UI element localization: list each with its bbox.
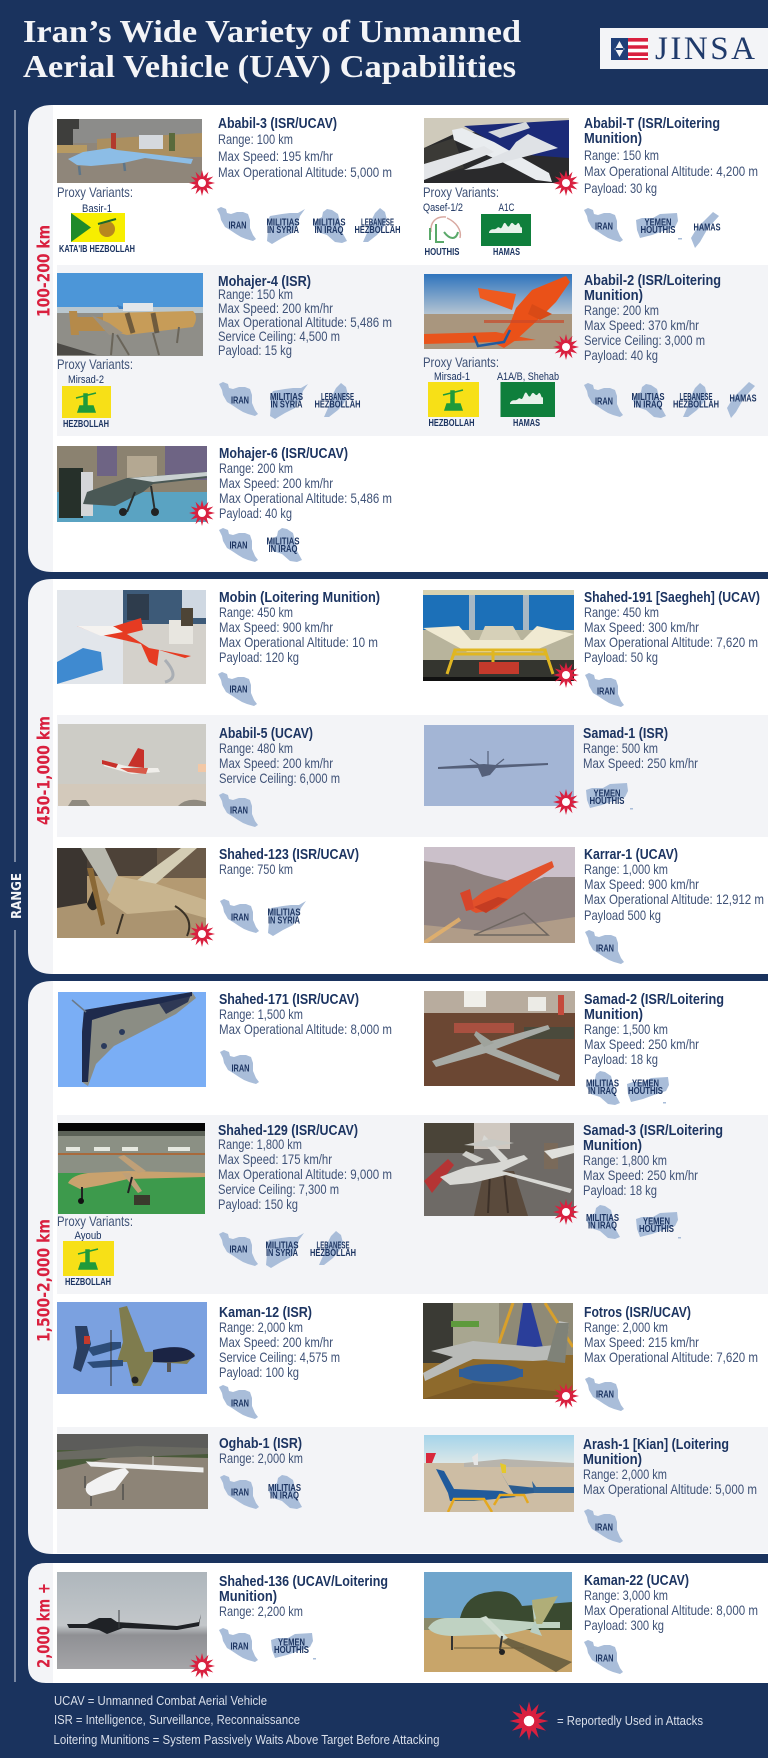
map: Iran bbox=[584, 1509, 623, 1543]
map: Lebanese Hezbollah: HEZBOLLAH bbox=[314, 400, 360, 410]
map: Iran bbox=[219, 793, 258, 827]
specs bbox=[584, 1573, 758, 1633]
map: Militias in Iraq: IN IRAQ bbox=[634, 400, 663, 410]
map: Yemen Houthis: HOUTHIS bbox=[639, 1224, 674, 1235]
map: Militias in Iraq: MILITIAS bbox=[312, 218, 346, 228]
attack marker bbox=[553, 334, 579, 360]
specs: Mohajer-4 (ISR) bbox=[218, 274, 311, 290]
photo: Samad-3 bbox=[424, 1123, 574, 1216]
proxy variants: KATA'IB HEZBOLLAH bbox=[59, 244, 135, 255]
proxy variants: HEZBOLLAH bbox=[65, 1277, 111, 1288]
proxy variants: Mirsad-2 bbox=[68, 374, 104, 386]
card: Kaman-12 bbox=[57, 1302, 340, 1419]
specs: Munition) bbox=[219, 1589, 277, 1605]
specs bbox=[219, 726, 340, 786]
proxy variants: A1C bbox=[498, 202, 515, 214]
specs: Payload: 30 kg bbox=[584, 180, 657, 196]
specs: Munition) bbox=[583, 1138, 642, 1154]
specs: Max Speed: 250 km/hr bbox=[583, 1167, 698, 1183]
map: Militias in Iraq bbox=[632, 384, 666, 418]
specs bbox=[583, 726, 698, 771]
card: Samad-3 bbox=[424, 1123, 723, 1239]
specs: Samad-2 (ISR/Loitering bbox=[584, 992, 724, 1008]
map: Iran: IRAN bbox=[596, 1390, 614, 1400]
proxy variants: HAMAS bbox=[513, 418, 540, 429]
proxy variants: HEZBOLLAH bbox=[63, 419, 109, 430]
photo: Shahed-136 bbox=[57, 1572, 207, 1669]
map: Militias in Iraq: IN IRAQ bbox=[314, 225, 344, 236]
photo: Oghab-1 bbox=[57, 1434, 208, 1509]
specs: Kaman-22 (UCAV) bbox=[584, 1573, 689, 1589]
specs: Service Ceiling: 3,000 m bbox=[584, 332, 705, 348]
specs: Mohajer-6 (ISR/UCAV) bbox=[219, 446, 348, 462]
map: Hamas bbox=[727, 382, 757, 418]
proxy variants: Proxy Variants: bbox=[57, 184, 133, 200]
specs: Range: 2,000 km bbox=[584, 1319, 668, 1335]
specs: Munition) bbox=[584, 131, 642, 147]
icon: attack marker key bbox=[510, 1702, 548, 1740]
specs bbox=[583, 1123, 723, 1198]
specs: Max Speed: 175 km/hr bbox=[218, 1151, 332, 1167]
specs bbox=[584, 1305, 758, 1365]
specs: Max Operational Altitude: 5,486 m bbox=[219, 490, 392, 506]
specs: Range: 480 km bbox=[219, 740, 293, 756]
specs: Payload: 18 kg bbox=[583, 1182, 657, 1198]
specs: Range: 100 km bbox=[218, 131, 293, 147]
photo: Karrar-1 bbox=[424, 847, 575, 943]
map: Militias in Iraq bbox=[586, 1071, 620, 1105]
specs: Payload: 15 kg bbox=[218, 342, 292, 358]
photo: Ababil-5 bbox=[58, 724, 206, 806]
specs: Arash-1 [Kian] (Loitering bbox=[583, 1437, 729, 1453]
map: Iran: IRAN bbox=[230, 1244, 248, 1256]
map: Militias in Iraq bbox=[312, 209, 347, 243]
specs: Range: 500 km bbox=[583, 740, 658, 756]
specs: Range: 1,500 km bbox=[584, 1021, 668, 1037]
map: Lebanese Hezbollah: LEBANESE bbox=[680, 392, 713, 403]
card: Shahed-191 bbox=[423, 590, 760, 707]
map: Yemen Houthis bbox=[271, 1633, 316, 1660]
specs: Oghab-1 (ISR) bbox=[219, 1436, 302, 1452]
specs: Shahed-129 (ISR/UCAV) bbox=[218, 1123, 358, 1139]
specs: Max Speed: 195 km/hr bbox=[218, 148, 333, 164]
specs bbox=[219, 1574, 388, 1619]
map: Iran bbox=[219, 1385, 258, 1419]
specs: Range: 2,000 km bbox=[583, 1466, 667, 1482]
map: Iran: IRAN bbox=[230, 806, 248, 816]
proxy variants bbox=[423, 354, 559, 429]
specs: Munition) bbox=[584, 1007, 643, 1023]
specs: Ababil-5 (UCAV) bbox=[219, 726, 313, 742]
specs: Karrar-1 (UCAV) bbox=[584, 847, 678, 863]
map: Militias in Iraq bbox=[268, 1475, 302, 1509]
specs: Range: 450 km bbox=[584, 604, 659, 620]
map: Militias in Iraq: IN IRAQ bbox=[588, 1220, 617, 1232]
map: Iran bbox=[220, 899, 259, 933]
photo: Ababil-2 bbox=[424, 274, 572, 349]
map: Yemen Houthis: YEMEN bbox=[643, 1216, 670, 1228]
specs: Range: 1,800 km bbox=[583, 1152, 667, 1168]
map: Iran: IRAN bbox=[231, 1398, 249, 1410]
map: Lebanese Hezbollah: LEBANESE bbox=[321, 392, 354, 403]
card: Samad-1 bbox=[424, 725, 698, 815]
specs: Max Speed: 250 km/hr bbox=[584, 1036, 699, 1052]
specs: Samad-1 (ISR) bbox=[583, 726, 668, 742]
attack marker bbox=[553, 170, 579, 196]
specs: Max Speed: 250 km/hr bbox=[583, 755, 698, 771]
card: Karrar-1 bbox=[424, 847, 764, 964]
specs bbox=[583, 1437, 757, 1497]
map: Iran: IRAN bbox=[596, 944, 614, 954]
map: Yemen Houthis: YEMEN bbox=[278, 1638, 305, 1648]
legend: Loitering Munitions = System Passively Waits Above Target Before Attacking bbox=[54, 1732, 440, 1747]
map: Iran: IRAN bbox=[231, 1488, 249, 1498]
specs: Payload: 120 kg bbox=[219, 649, 299, 665]
map: Iran bbox=[218, 672, 257, 706]
panel: 2,000 km +: 2,000 km + bbox=[34, 1583, 54, 1668]
map: Iran: IRAN bbox=[595, 222, 613, 232]
map: Iran: IRAN bbox=[597, 686, 615, 698]
specs: Payload: 300 kg bbox=[584, 1617, 664, 1633]
photo: Mobin bbox=[57, 590, 206, 684]
map: Hamas: HAMAS bbox=[694, 222, 721, 234]
proxy variants: Proxy Variants: bbox=[423, 354, 499, 370]
specs: Max Speed: 200 km/hr bbox=[218, 300, 333, 316]
legend: UCAV = Unmanned Combat Aerial Vehicle bbox=[54, 1693, 267, 1708]
map: Lebanese Hezbollah: HEZBOLLAH bbox=[310, 1248, 356, 1259]
legend: ISR = Intelligence, Surveillance, Reconnaissance bbox=[54, 1712, 300, 1727]
specs: Munition) bbox=[584, 288, 643, 304]
specs: Ababil-T (ISR/Loitering bbox=[584, 116, 720, 132]
map: Militias in Iraq bbox=[266, 528, 302, 562]
logo: JINSA: JINSA bbox=[655, 31, 755, 67]
proxy variants bbox=[57, 184, 135, 255]
proxy variants: Proxy Variants: bbox=[57, 1213, 133, 1229]
specs: Range: 200 km bbox=[584, 302, 659, 318]
proxy variants: HEZBOLLAH bbox=[428, 418, 474, 429]
specs bbox=[584, 590, 760, 665]
specs: Max Speed: 370 km/hr bbox=[584, 317, 699, 333]
proxy variants: HAMAS bbox=[493, 247, 520, 258]
card: Shahed-123 bbox=[57, 847, 359, 947]
photo: Mohajer-6 bbox=[57, 446, 207, 522]
map: Yemen Houthis bbox=[586, 783, 633, 810]
map: Yemen Houthis bbox=[636, 1212, 681, 1238]
proxy variants bbox=[423, 184, 531, 258]
specs: Max Operational Altitude: 9,000 m bbox=[218, 1166, 392, 1182]
photo: Shahed-129 bbox=[58, 1123, 205, 1214]
card: Shahed-136 bbox=[57, 1572, 388, 1679]
range axis: RANGE bbox=[10, 873, 25, 919]
card: Fotros bbox=[423, 1303, 758, 1411]
map: Hamas bbox=[691, 212, 721, 248]
specs bbox=[218, 116, 392, 180]
specs: Samad-3 (ISR/Loitering bbox=[583, 1123, 723, 1139]
specs: Service Ceiling: 4,575 m bbox=[219, 1349, 340, 1365]
specs: Shahed-171 (ISR/UCAV) bbox=[219, 992, 359, 1008]
map: Yemen Houthis: YEMEN bbox=[594, 788, 620, 800]
map: Yemen Houthis bbox=[627, 1077, 669, 1104]
photo: Fotros bbox=[423, 1303, 573, 1399]
map: Militias in Syria: MILITIAS bbox=[266, 218, 300, 228]
attack marker bbox=[553, 1199, 579, 1225]
attack marker bbox=[189, 1653, 215, 1679]
attack marker bbox=[553, 662, 579, 688]
specs: Max Operational Altitude: 5,000 m bbox=[218, 164, 392, 180]
specs: Shahed-123 (ISR/UCAV) bbox=[219, 847, 359, 863]
proxy variants: Ayoub bbox=[74, 1230, 102, 1242]
map: Militias in Iraq: MILITIAS bbox=[586, 1213, 619, 1224]
map: Iran: IRAN bbox=[595, 1522, 613, 1534]
panel: 2,000 km + bbox=[28, 1563, 768, 1683]
map: Lebanese Hezbollah: LEBANESE bbox=[316, 1240, 350, 1252]
card: Ababil-T bbox=[423, 116, 758, 258]
title: Iran’s Wide Variety of Unmanned bbox=[23, 13, 521, 49]
specs: Payload: 18 kg bbox=[584, 1051, 658, 1067]
map: Iran bbox=[219, 528, 258, 562]
map: Lebanese Hezbollah bbox=[310, 1231, 356, 1265]
map: Yemen Houthis bbox=[636, 213, 682, 240]
specs: Payload: 40 kg bbox=[584, 347, 658, 363]
map: Iran bbox=[217, 207, 256, 241]
attack marker bbox=[189, 500, 215, 526]
specs: Munition) bbox=[583, 1452, 642, 1468]
proxy variants: Qasef-1/2 bbox=[423, 202, 463, 214]
map: Iran: IRAN bbox=[231, 396, 249, 406]
map: Iran: IRAN bbox=[230, 1642, 248, 1652]
specs: Max Operational Altitude: 5,486 m bbox=[218, 314, 392, 330]
map: Yemen Houthis: YEMEN bbox=[644, 218, 672, 228]
proxy variants bbox=[57, 356, 133, 430]
card: Mohajer-6 bbox=[57, 446, 392, 562]
map: Iran: IRAN bbox=[230, 684, 248, 696]
map: Lebanese Hezbollah: LEBANESE bbox=[361, 218, 394, 228]
specs: Range: 2,000 km bbox=[219, 1450, 303, 1466]
specs: Range: 1,800 km bbox=[218, 1136, 302, 1152]
card: Mobin bbox=[57, 590, 380, 706]
photo: Shahed-123 bbox=[57, 848, 206, 938]
map: Yemen Houthis: HOUTHIS bbox=[274, 1645, 309, 1656]
specs: Service Ceiling: 4,500 m bbox=[218, 328, 340, 344]
specs bbox=[218, 274, 392, 358]
photo: Shahed-171 bbox=[58, 992, 206, 1087]
map: Militias in Iraq bbox=[586, 1205, 620, 1239]
photo: Kaman-12 bbox=[57, 1302, 207, 1394]
specs: Range: 2,200 km bbox=[219, 1603, 303, 1619]
specs: Range: 200 km bbox=[219, 460, 293, 476]
map: Militias in Syria: IN SYRIA bbox=[270, 400, 302, 410]
photo: Samad-1 bbox=[424, 725, 574, 806]
photo: Samad-2 bbox=[424, 991, 575, 1086]
map: Iran bbox=[585, 930, 624, 964]
specs: Service Ceiling: 6,000 m bbox=[219, 770, 340, 786]
specs: Max Speed: 200 km/hr bbox=[219, 755, 333, 771]
map: Iran: IRAN bbox=[232, 1064, 250, 1074]
map: Iran bbox=[585, 673, 624, 707]
map: Militias in Syria: IN SYRIA bbox=[268, 916, 300, 926]
map: Yemen Houthis: HOUTHIS bbox=[640, 225, 676, 236]
panel: 1,500-2,000 km bbox=[28, 981, 768, 1554]
card: Ababil-2 bbox=[423, 273, 757, 429]
map: Yemen Houthis: YEMEN bbox=[632, 1078, 659, 1090]
map: Militias in Iraq: MILITIAS bbox=[266, 536, 300, 548]
specs bbox=[219, 446, 392, 521]
map: Iran bbox=[220, 1475, 259, 1509]
map: Militias in Syria bbox=[266, 1233, 304, 1268]
specs: Range: 1,500 km bbox=[219, 1006, 303, 1022]
photo: Arash-1 bbox=[424, 1435, 574, 1512]
map: Lebanese Hezbollah bbox=[673, 383, 719, 417]
map: Iran bbox=[584, 1640, 623, 1674]
legend: = Reportedly Used in Attacks bbox=[557, 1713, 703, 1728]
map: Iran: IRAN bbox=[230, 540, 248, 552]
map: Militias in Syria bbox=[270, 384, 308, 419]
specs: Range: 1,000 km bbox=[584, 861, 668, 877]
attack marker bbox=[189, 170, 215, 196]
proxy variants: A1A/B, Shehab bbox=[497, 371, 559, 383]
specs: Payload: 40 kg bbox=[219, 505, 292, 521]
map: Militias in Iraq: IN IRAQ bbox=[588, 1086, 617, 1097]
proxy variants: Basir-1 bbox=[82, 203, 112, 215]
specs: Payload: 50 kg bbox=[584, 649, 658, 665]
specs: Max Operational Altitude: 8,000 m bbox=[219, 1021, 392, 1037]
map: Iran: IRAN bbox=[595, 396, 613, 408]
map: Hamas: HAMAS bbox=[730, 394, 757, 404]
map: Iran bbox=[584, 383, 623, 417]
card: Kaman-22 bbox=[424, 1572, 758, 1674]
panel: 1,500-2,000 km: 1,500-2,000 km bbox=[34, 1219, 54, 1342]
title bbox=[23, 13, 521, 84]
specs: Range: 150 km bbox=[584, 147, 659, 163]
photo: Kaman-22 bbox=[424, 1572, 572, 1672]
map: Militias in Iraq: IN IRAQ bbox=[268, 544, 298, 555]
map: Militias in Syria bbox=[268, 901, 306, 936]
specs: Range: 750 km bbox=[219, 861, 293, 877]
card: Ababil-3 bbox=[57, 116, 400, 255]
specs: Service Ceiling: 7,300 m bbox=[218, 1181, 339, 1197]
specs bbox=[219, 590, 380, 665]
specs bbox=[584, 116, 758, 196]
specs bbox=[584, 273, 721, 363]
panel: 450-1,000 km: 450-1,000 km bbox=[34, 716, 54, 825]
specs: Max Speed: 900 km/hr bbox=[219, 619, 333, 635]
card: Ababil-5 bbox=[58, 724, 340, 827]
specs: Kaman-12 (ISR) bbox=[219, 1305, 312, 1321]
card: Samad-2 bbox=[424, 991, 724, 1105]
photo: Ababil-T bbox=[424, 118, 569, 183]
map: Militias in Syria bbox=[266, 209, 305, 244]
specs: Payload 500 kg bbox=[584, 907, 661, 923]
specs: Range: 3,000 km bbox=[584, 1587, 668, 1603]
specs: Max Speed: 200 km/hr bbox=[219, 475, 333, 491]
map: Iran bbox=[219, 1628, 258, 1662]
specs: Range: 2,000 km bbox=[219, 1319, 303, 1335]
map: Iran: IRAN bbox=[231, 912, 249, 924]
specs: Payload: 150 kg bbox=[218, 1196, 298, 1212]
map: Militias in Syria: IN SYRIA bbox=[267, 225, 299, 236]
specs: Max Speed: 215 km/hr bbox=[584, 1334, 699, 1350]
attack marker bbox=[189, 921, 215, 947]
specs: Max Speed: 200 km/hr bbox=[219, 1334, 333, 1350]
specs: Max Speed: 300 km/hr bbox=[584, 619, 699, 635]
card: Mohajer-4 bbox=[57, 273, 392, 430]
specs: Max Operational Altitude: 10 m bbox=[219, 634, 378, 650]
specs bbox=[219, 992, 392, 1037]
specs: Range: 150 km bbox=[218, 286, 293, 302]
panel: 100-200 km: 100-200 km bbox=[34, 225, 54, 317]
specs bbox=[584, 992, 724, 1067]
specs bbox=[219, 847, 359, 877]
map: Militias in Syria: IN SYRIA bbox=[266, 1248, 298, 1259]
specs: Mobin (Loitering Munition) bbox=[219, 590, 380, 606]
proxy variants: HOUTHIS bbox=[424, 247, 460, 258]
map: Militias in Syria: MILITIAS bbox=[266, 1240, 299, 1252]
legend bbox=[54, 1693, 703, 1747]
map: Militias in Iraq: IN IRAQ bbox=[270, 1490, 299, 1502]
attack marker bbox=[553, 1383, 579, 1409]
panel: 450-1,000 km bbox=[28, 579, 768, 974]
photo: Mohajer-4 bbox=[57, 273, 203, 356]
specs: Range: 450 km bbox=[219, 604, 293, 620]
map: Iran: IRAN bbox=[228, 220, 246, 232]
card: Arash-1 bbox=[424, 1435, 757, 1543]
map: Militias in Iraq: MILITIAS bbox=[268, 1483, 301, 1494]
specs: Fotros (ISR/UCAV) bbox=[584, 1305, 691, 1321]
photo: Ababil-3 bbox=[57, 119, 202, 183]
map: Lebanese Hezbollah bbox=[354, 208, 400, 242]
specs: Shahed-136 (UCAV/Loitering bbox=[219, 1574, 388, 1590]
map: Lebanese Hezbollah bbox=[314, 383, 360, 417]
specs: Ababil-2 (ISR/Loitering bbox=[584, 273, 721, 289]
specs bbox=[584, 847, 764, 923]
map: Iran: IRAN bbox=[596, 1654, 614, 1664]
specs: Payload: 100 kg bbox=[219, 1364, 299, 1380]
proxy variants bbox=[57, 1213, 133, 1288]
specs bbox=[218, 1123, 392, 1212]
map: Yemen Houthis: HOUTHIS bbox=[590, 796, 625, 807]
map: Iran bbox=[219, 1232, 258, 1266]
map: Iran bbox=[220, 1050, 259, 1084]
map: Militias in Syria: MILITIAS bbox=[268, 908, 301, 918]
proxy variants: Proxy Variants: bbox=[423, 184, 499, 200]
map: Militias in Iraq: MILITIAS bbox=[586, 1078, 619, 1090]
attack marker bbox=[553, 789, 579, 815]
card: Shahed-171 bbox=[58, 992, 392, 1087]
map: Lebanese Hezbollah: HEZBOLLAH bbox=[673, 400, 719, 410]
panel: 100-200 km bbox=[28, 105, 768, 572]
photo: Shahed-191 bbox=[423, 590, 574, 681]
card: Shahed-129 bbox=[57, 1123, 392, 1288]
map: Iran bbox=[219, 382, 258, 416]
logo: JINSA bbox=[600, 28, 768, 69]
map: Iran bbox=[584, 208, 623, 242]
map: Militias in Iraq: MILITIAS bbox=[632, 392, 665, 403]
specs: Max Speed: 900 km/hr bbox=[584, 876, 699, 892]
proxy variants: Proxy Variants: bbox=[57, 356, 133, 372]
specs bbox=[219, 1436, 303, 1466]
proxy variants: Mirsad-1 bbox=[434, 371, 470, 383]
map: Yemen Houthis: HOUTHIS bbox=[628, 1086, 663, 1097]
specs bbox=[219, 1305, 340, 1380]
map: Iran bbox=[585, 1377, 624, 1411]
title: Aerial Vehicle (UAV) Capabilities bbox=[23, 48, 516, 84]
map: Militias in Syria: MILITIAS bbox=[270, 392, 303, 403]
card: Oghab-1 bbox=[57, 1434, 303, 1509]
specs: Ababil-3 (ISR/UCAV) bbox=[218, 116, 337, 132]
map: Lebanese Hezbollah: HEZBOLLAH bbox=[354, 225, 400, 236]
